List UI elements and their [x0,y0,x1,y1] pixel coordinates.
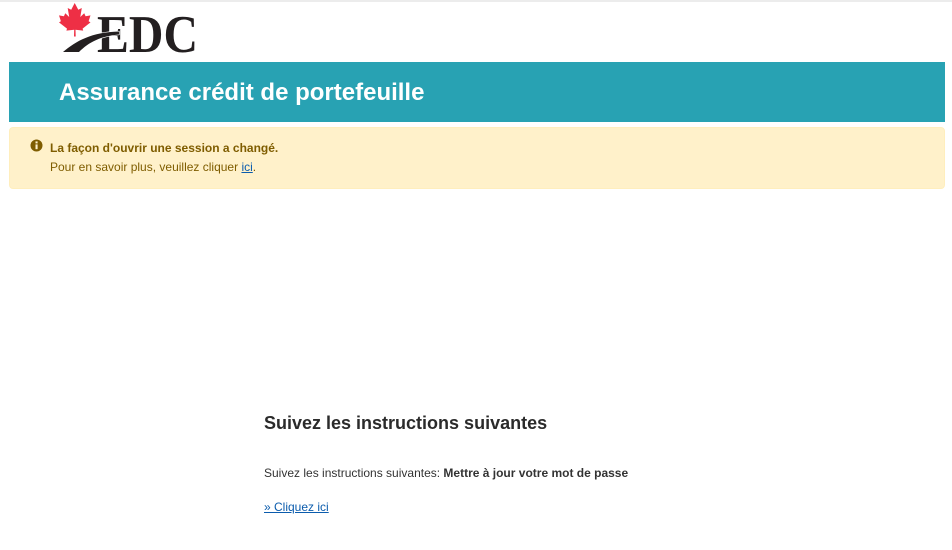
title: Assurance crédit de portefeuille [59,79,424,106]
top browser edge line [0,0,952,2]
alert text: Pour en savoir plus, veuillez cliquer ici. [50,160,256,174]
link: click here: » Cliquez ici [264,500,329,514]
heading: instructions: Suivez les instructions suivantes [264,413,547,433]
text block: instructions: Suivez les instructions suivantes: Mettre à jour votre mot de passe [264,466,628,480]
icon: maple leaf [59,3,90,36]
logo: EDC with maple leaf [59,3,198,58]
icon: info circle [30,140,42,152]
logo swoosh [63,32,119,52]
alert heading: La façon d'ouvrir une session a changé. [50,141,278,155]
panel: alert notice [9,127,945,189]
banner: page title [9,62,945,122]
